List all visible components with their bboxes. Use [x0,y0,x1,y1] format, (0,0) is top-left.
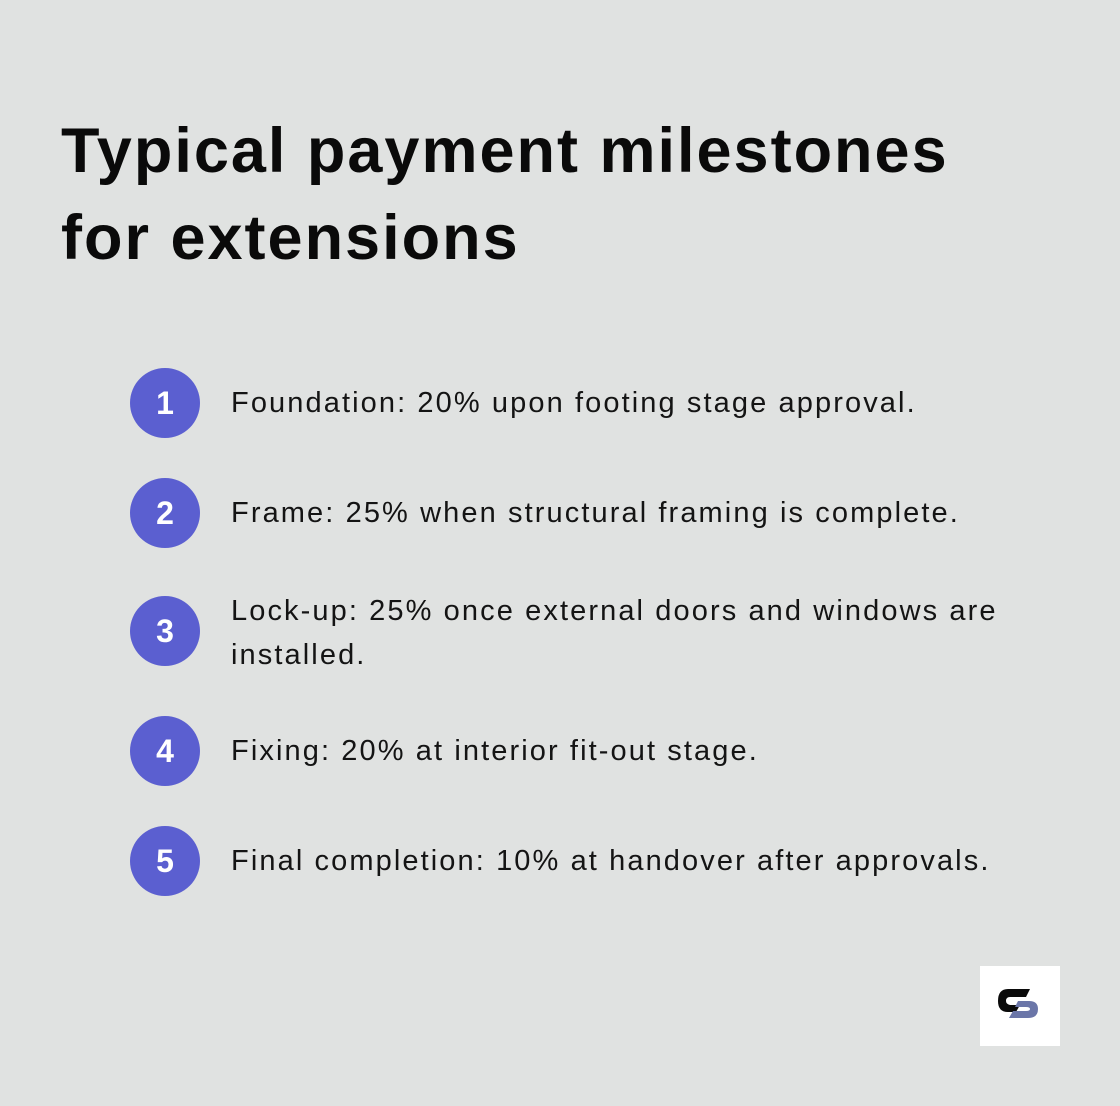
circle 4 [130,716,200,786]
text 4: Fixing: 20% at interior fit-out stage. [231,735,759,767]
title: Typical payment milestones [61,116,949,186]
logo [980,966,1060,1046]
text 5: Final completion: 10% at handover after approvals. [231,845,990,877]
text 2: Frame: 25% when structural framing is complete. [231,497,960,529]
item 5 [130,826,990,896]
text 1: Foundation: 20% upon footing stage approval. [231,387,917,419]
circle 4: 4 [156,733,174,769]
title [61,116,949,273]
item 4 [130,716,759,786]
circle 1: 1 [156,385,174,421]
circle 3 [130,596,200,666]
text 3: Lock-up: 25% once external doors and windows are [231,595,998,627]
circle 5 [130,826,200,896]
circle 1 [130,368,200,438]
item 2 [130,478,960,548]
circle 2 [130,478,200,548]
circle 3: 3 [156,613,174,649]
title: for extensions [61,203,520,273]
circle 2: 2 [156,495,174,531]
item 1 [130,368,917,438]
text 3 [231,595,998,671]
item 3 [130,595,998,671]
text 3: installed. [231,639,366,671]
circle 5: 5 [156,843,174,879]
